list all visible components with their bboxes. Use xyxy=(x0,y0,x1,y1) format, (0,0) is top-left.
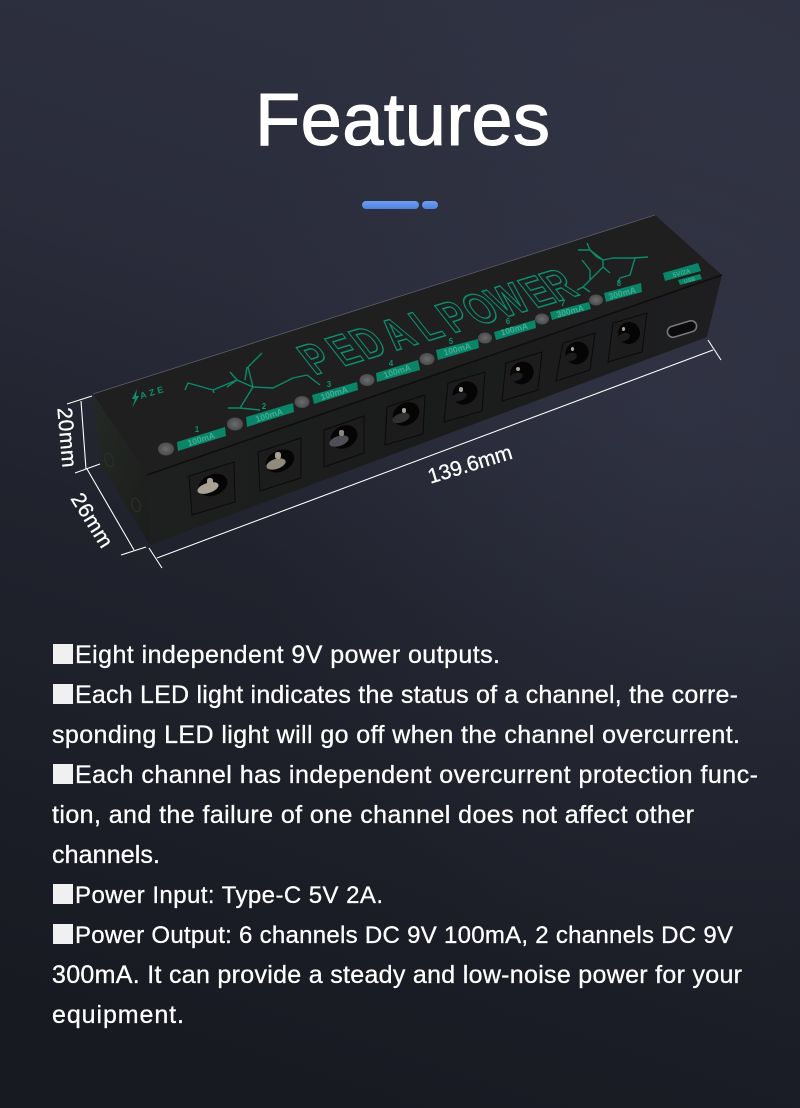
bullet: overcurrent protection: Each channel has independent overcurrent protection func- xyxy=(75,761,758,789)
crack artwork xyxy=(185,243,648,410)
channel numbers: 8 xyxy=(617,279,622,288)
DC jack sockets xyxy=(189,313,647,515)
device back edge highlight xyxy=(93,215,655,394)
bullet: LED status: sponding LED light will go off when the channel overcurrent. xyxy=(52,721,740,749)
channel label text: 100mA xyxy=(186,430,216,448)
device left face xyxy=(93,396,150,545)
bullet: overcurrent protection: tion, and the failure of one channel does not affect other xyxy=(52,801,694,829)
bullet: overcurrent protection: channels. xyxy=(52,841,160,869)
channel label text: 300mA xyxy=(607,285,637,302)
channel numbers: 3 xyxy=(327,380,332,389)
dimension: depth 26mm: 26mm xyxy=(66,489,117,552)
channel numbers: 7 xyxy=(561,299,566,308)
jack pins xyxy=(196,327,631,496)
logo xyxy=(132,384,165,408)
USB-C port xyxy=(666,319,698,339)
left side screws xyxy=(103,452,142,513)
dimension: height 20mm: 20mm xyxy=(52,407,81,468)
channel label text: 100mA xyxy=(442,341,472,358)
title accent bars xyxy=(362,201,438,209)
feature list xyxy=(52,641,758,1029)
dimension: length 139.6mm xyxy=(149,340,721,568)
device top front edge xyxy=(147,275,722,475)
product illustration: power supply xyxy=(93,215,722,545)
channel numbers xyxy=(195,279,622,434)
bullet: power output xyxy=(52,922,742,1029)
logo: AZE xyxy=(139,384,165,401)
channel numbers: 1 xyxy=(195,425,200,434)
channel label text: 5V/2A xyxy=(672,268,692,279)
device top face xyxy=(93,215,722,475)
bullet: power output: Power Output: 6 channels DC 9V 100mA, 2 channels DC 9V xyxy=(75,922,733,949)
bullet: power output: equipment. xyxy=(52,1001,184,1029)
jack holes xyxy=(195,318,644,500)
channel numbers: 2 xyxy=(262,402,267,411)
dimension: length 139.6mm: 139.6mm xyxy=(425,441,515,488)
channel label text: USB xyxy=(683,277,696,285)
device front face xyxy=(147,275,722,545)
channel label text: 100mA xyxy=(382,362,412,380)
LED indicators xyxy=(158,294,603,456)
title: Features xyxy=(255,78,550,161)
channel label plates xyxy=(177,263,702,451)
channel label text: 100mA xyxy=(254,406,284,424)
channel numbers: 4 xyxy=(389,359,394,368)
channel numbers: 5 xyxy=(449,337,454,346)
bullet: power input: Power Input: Type-C 5V 2A. xyxy=(75,882,383,909)
channel label text xyxy=(186,268,696,448)
dimension: depth 26mm xyxy=(66,469,146,555)
bullet: overcurrent protection xyxy=(52,761,758,869)
dimension: height 20mm xyxy=(52,396,100,473)
channel label text: 100mA xyxy=(319,384,349,402)
device heading: PEDAL POWER: PEDAL POWER xyxy=(288,260,587,383)
channel numbers: 6 xyxy=(506,317,511,326)
bullet: power output: 300mA. It can provide a steady and low-noise power for your xyxy=(52,961,742,989)
bullet: eight outputs: Eight independent 9V power outputs. xyxy=(75,641,500,669)
channel label text: 300mA xyxy=(555,303,585,320)
bullet: LED status: Each LED light indicates the status of a channel, the corre- xyxy=(75,681,738,709)
bullet: LED status xyxy=(52,681,740,749)
channel label text: 100mA xyxy=(499,321,529,338)
